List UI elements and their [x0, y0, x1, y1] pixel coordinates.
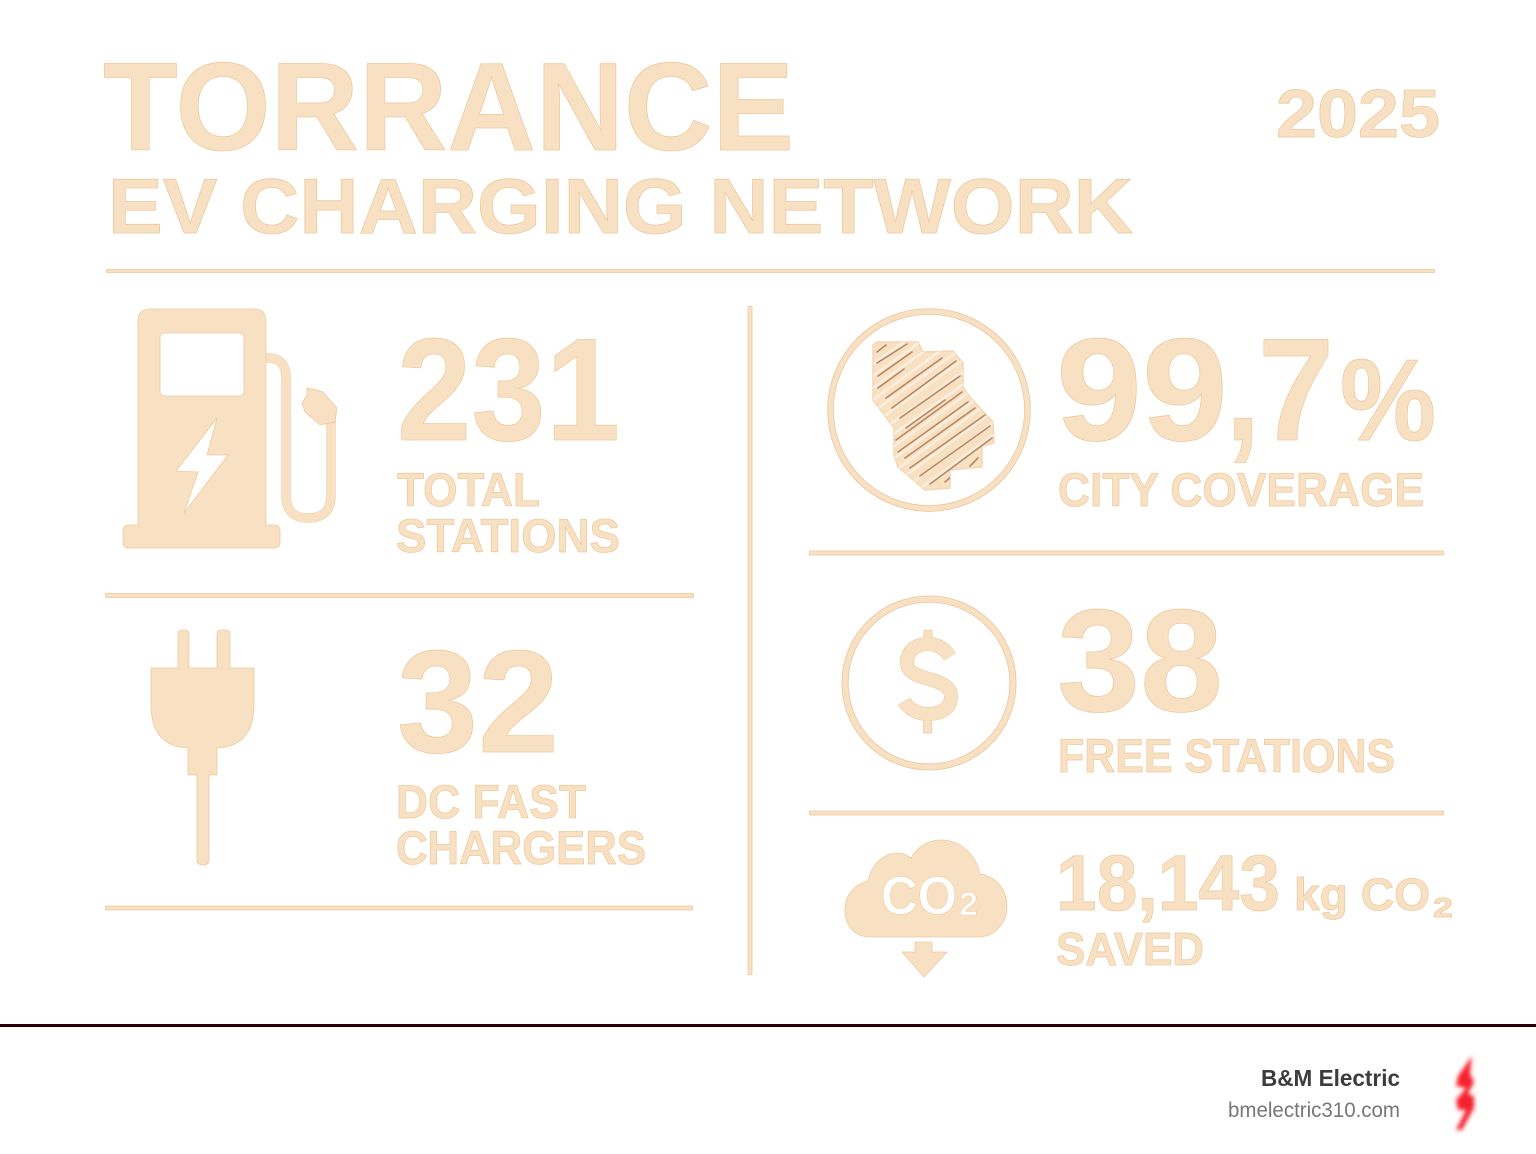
number: 38: 38	[1057, 579, 1223, 742]
icon: charging pump	[123, 309, 337, 548]
icon: red lightning logo	[1456, 1056, 1474, 1130]
subtitle: EV charging network: EV CHARGING NETWORK	[108, 162, 1133, 250]
label: DC fast chargers	[396, 775, 646, 874]
number: 99,7%: ,	[1226, 308, 1260, 471]
label: total stations	[396, 463, 620, 562]
number: 231: 231	[397, 308, 620, 471]
number: 99,7%: 7	[1258, 308, 1334, 471]
number: 99,7%: %	[1340, 335, 1436, 465]
footer brand	[1228, 1056, 1474, 1130]
label: DC fast chargers: DC FAST	[396, 775, 586, 828]
icon: CO2 cloud	[845, 840, 1007, 977]
number: 18,143 kg CO2: kg CO	[1294, 869, 1430, 920]
icon: CO2 cloud: CO	[881, 866, 957, 926]
icon: dollar coin	[845, 599, 1013, 767]
panel: free stations	[845, 579, 1395, 782]
icon: plug	[151, 630, 254, 865]
number: 32: 32	[397, 620, 559, 783]
label: total stations: STATIONS	[396, 509, 620, 562]
brand url: bmelectric310.com	[1228, 1099, 1400, 1122]
label: free stations: FREE STATIONS	[1058, 729, 1395, 782]
panel: CO2 saved	[845, 838, 1453, 977]
icon: city map in circle	[830, 312, 1028, 508]
number: 99,7%: 99	[1056, 308, 1228, 471]
label: DC fast chargers: CHARGERS	[396, 821, 646, 874]
number: 18,143 kg CO2: 2	[1433, 892, 1453, 923]
label: total stations: TOTAL	[397, 463, 540, 516]
panel: DC fast chargers	[151, 620, 646, 874]
number: 18,143 kg CO2	[1056, 838, 1453, 927]
brand name: B&M Electric	[1261, 1065, 1400, 1091]
panel: total stations	[123, 308, 620, 562]
title: Torrance: TORRANCE	[103, 38, 794, 177]
label: saved: SAVED	[1056, 923, 1204, 975]
year: 2025	[1276, 76, 1440, 152]
panel: city coverage	[830, 308, 1436, 516]
number: 99,7%	[1056, 308, 1436, 471]
icon: CO2 cloud: 2	[959, 886, 978, 922]
label: city coverage: CITY COVERAGE	[1058, 463, 1424, 516]
number: 18,143 kg CO2: 18,143	[1056, 838, 1280, 927]
